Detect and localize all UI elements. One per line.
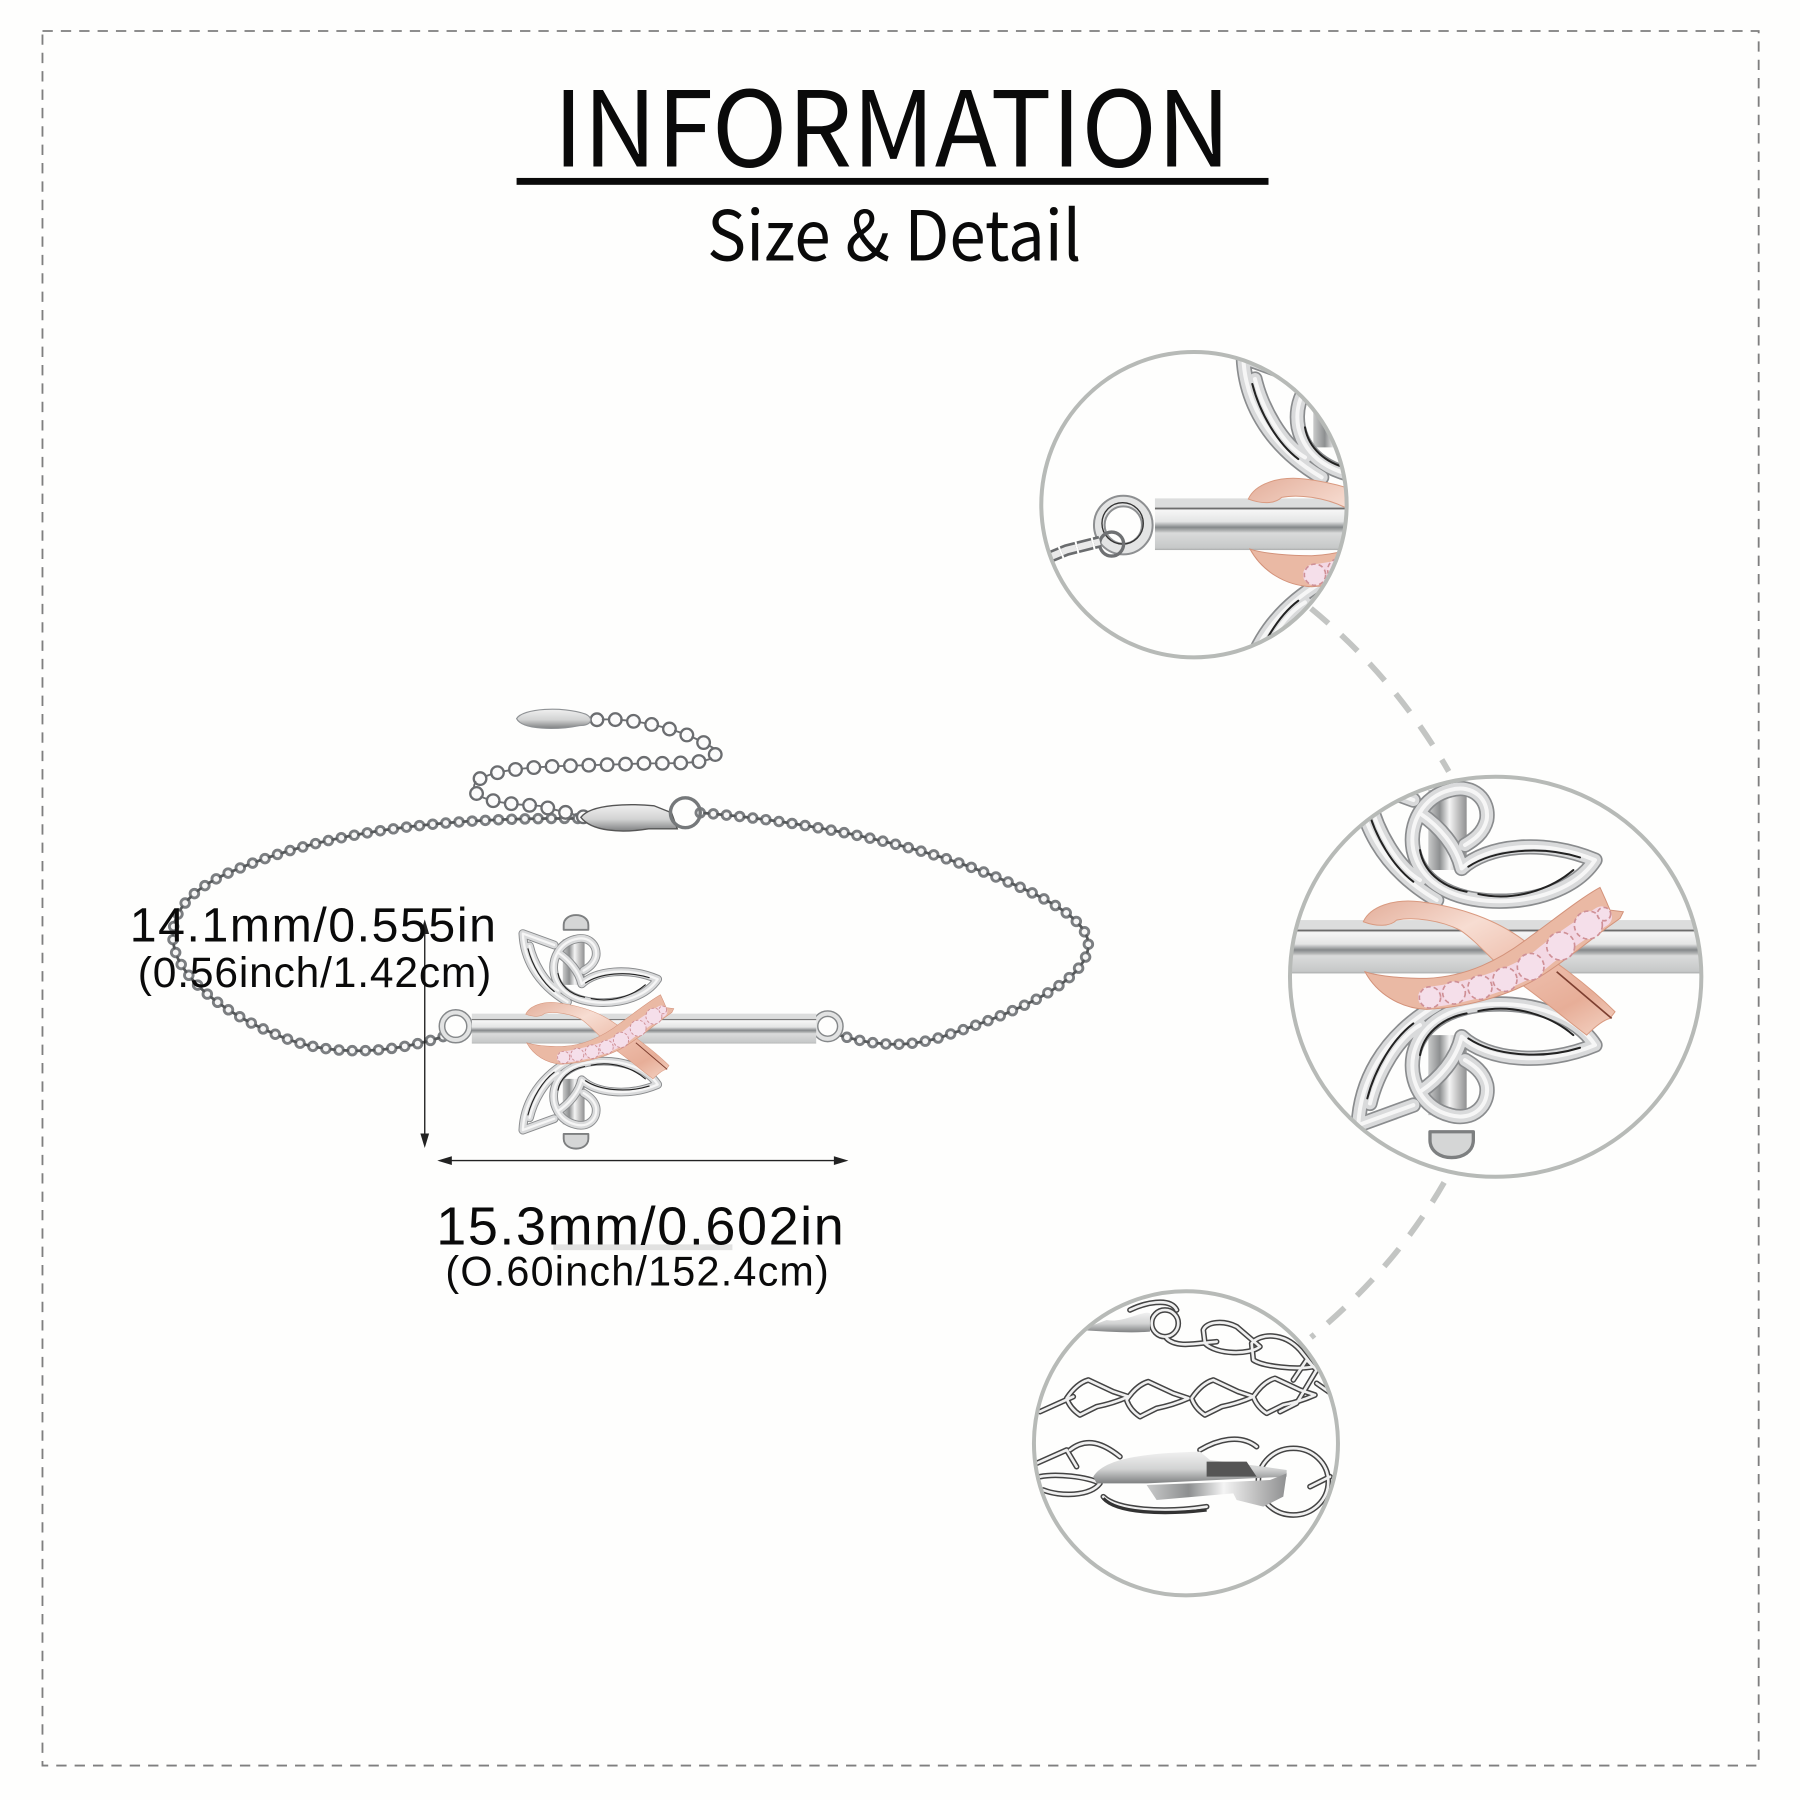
bracelet illustration bbox=[173, 709, 1088, 1149]
detail circle: bar end bbox=[1039, 350, 1349, 660]
title underline bbox=[517, 178, 1268, 185]
width dimension arrow bbox=[440, 1157, 846, 1164]
pendant bar rings bbox=[442, 1012, 840, 1040]
dashed connector top bbox=[1311, 608, 1449, 771]
height dimension arrow bbox=[421, 922, 428, 1146]
title: INFORMATION bbox=[553, 46, 1231, 197]
width label: 15.3mm/0.602in bbox=[436, 1196, 844, 1256]
rose gold ribbon bbox=[526, 995, 674, 1079]
extender end drop bbox=[517, 709, 591, 728]
chain left bbox=[173, 818, 580, 1051]
chain right bbox=[700, 813, 1088, 1044]
detail circle: clasp and chain bbox=[1034, 1291, 1338, 1595]
dashed connector bottom bbox=[1311, 1182, 1444, 1337]
subtitle: Size & Detail bbox=[707, 181, 1081, 281]
height label: 14.1mm/0.555in bbox=[130, 898, 496, 952]
height sublabel: (0.56inch/1.42cm) bbox=[138, 949, 491, 996]
pendant bar bbox=[472, 1014, 816, 1043]
butterfly wings bbox=[523, 915, 658, 1149]
detail circle: butterfly bbox=[1287, 748, 1707, 1177]
width sublabel: (O.60inch/152.4cm) bbox=[445, 1249, 829, 1295]
extender chain bbox=[474, 719, 716, 817]
width ghost mark bbox=[553, 1244, 732, 1250]
lobster clasp bbox=[581, 798, 700, 831]
